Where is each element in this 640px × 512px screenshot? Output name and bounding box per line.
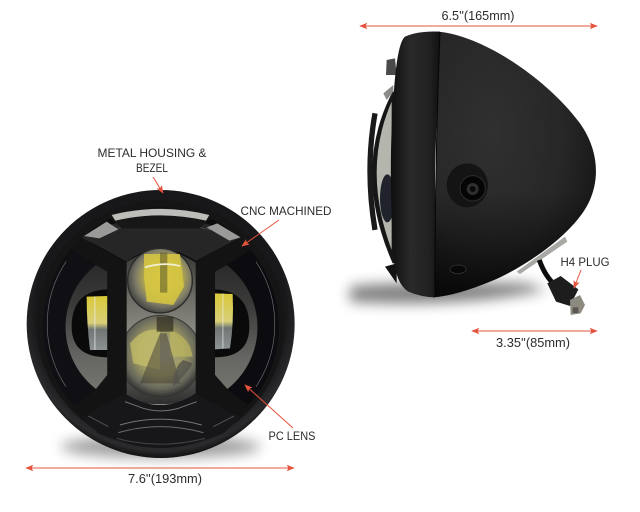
center housing xyxy=(125,251,197,406)
adjustment bolt xyxy=(447,163,488,207)
dimension: rear depth xyxy=(472,331,597,350)
ground shadow xyxy=(61,435,261,458)
upper lens xyxy=(128,248,192,313)
side view headlight xyxy=(350,32,596,315)
label: H4 plug: H4 PLUG xyxy=(560,255,610,269)
right window with side LED xyxy=(215,265,257,389)
outer bezel ring xyxy=(27,190,295,458)
seam line xyxy=(435,32,440,297)
label: CNC machined: CNC MACHINED xyxy=(240,204,332,218)
small screw xyxy=(450,265,466,274)
front view headlight xyxy=(27,190,295,458)
top light strip xyxy=(77,208,245,262)
label: PC lens: PC LENS xyxy=(268,429,316,443)
label: metal housing and bezel: BEZEL xyxy=(136,161,168,175)
lower lens xyxy=(119,315,202,405)
label: CNC machined xyxy=(240,204,332,246)
left window with side LED xyxy=(66,265,107,389)
dimension: side depth: 6.5''(165mm) xyxy=(442,8,514,23)
chrome bracket xyxy=(517,237,567,274)
left grille bar xyxy=(72,237,127,417)
ground shadow xyxy=(350,282,547,303)
housing shell xyxy=(433,32,596,297)
label: metal housing and bezel xyxy=(98,146,206,193)
label: H4 plug xyxy=(560,255,610,288)
dimension: rear depth: 3.35''(85mm) xyxy=(496,335,570,350)
front bezel xyxy=(391,32,440,297)
lens protruding front xyxy=(370,58,397,283)
side dark lens panels xyxy=(43,251,279,405)
dimension: front width: 7.6''(193mm) xyxy=(128,471,202,486)
right grille bar xyxy=(196,237,250,417)
cable and H4 plug xyxy=(539,260,585,315)
label: metal housing and bezel: METAL HOUSING & xyxy=(98,146,206,160)
label: PC lens xyxy=(245,385,316,443)
bottom grille section xyxy=(82,393,240,447)
